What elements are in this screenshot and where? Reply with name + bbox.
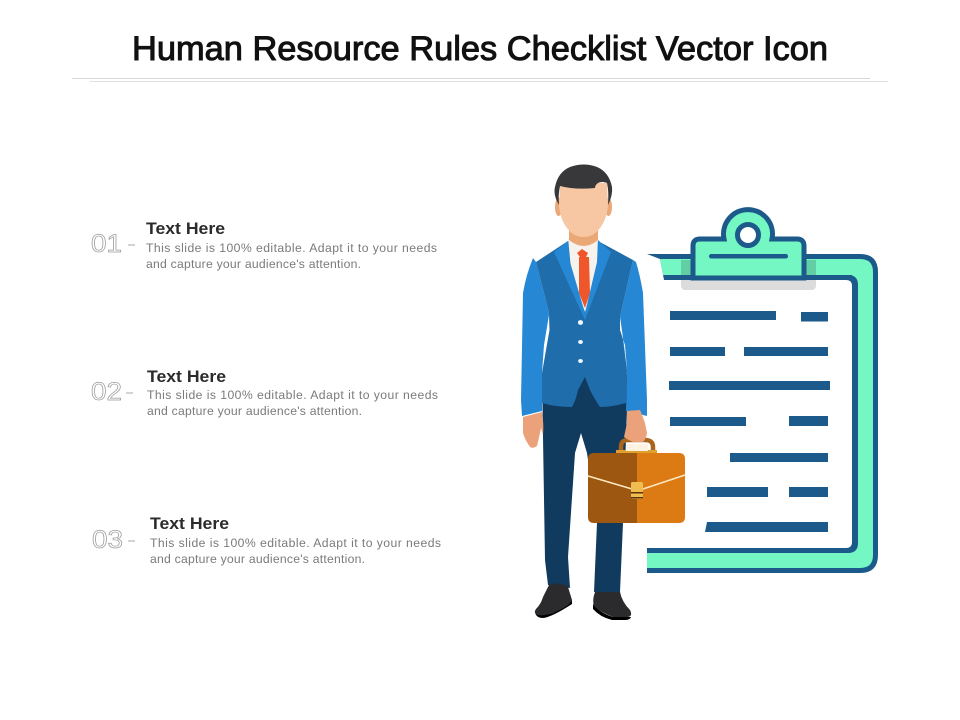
dash 03 — [128, 540, 135, 542]
sleeves — [521, 258, 647, 416]
checklist lines — [669, 311, 830, 532]
briefcase handle — [621, 440, 653, 451]
briefcase body — [588, 453, 637, 523]
shoes — [535, 583, 631, 620]
head — [554, 164, 612, 246]
description 03: and capture your audience's attention. — [150, 552, 365, 566]
dash 02 — [126, 392, 133, 394]
tie — [577, 249, 590, 308]
number 01: 01 — [91, 230, 122, 258]
right hand — [624, 410, 647, 442]
clipboard board — [647, 254, 878, 573]
lapels — [554, 240, 611, 320]
clip — [693, 210, 804, 278]
clipboard — [647, 210, 878, 573]
description 02: This slide is 100% editable. Adapt it to your needs — [147, 388, 438, 402]
item 01 — [91, 219, 437, 271]
buttons — [578, 320, 583, 363]
description 01 — [146, 241, 437, 271]
left hand — [523, 412, 543, 448]
item 02 — [91, 367, 438, 418]
description 02: and capture your audience's attention. — [147, 404, 362, 418]
number 02: 02 — [91, 378, 122, 406]
heading 02: Text Here — [147, 367, 226, 386]
number 03: 03 — [92, 526, 123, 554]
waistcoat — [536, 241, 633, 407]
title underline — [72, 78, 888, 82]
shirt — [568, 238, 598, 312]
clip shadow — [681, 260, 816, 290]
item 03 — [92, 514, 441, 566]
description 01: This slide is 100% editable. Adapt it to your needs — [146, 241, 437, 255]
briefcase — [588, 410, 685, 523]
description 03 — [150, 536, 441, 566]
heading 01: Text Here — [146, 219, 225, 238]
white sleeve gaps — [542, 315, 627, 373]
businessman — [521, 164, 685, 620]
title: Human Resource Rules Checklist Vector Icon — [132, 30, 828, 68]
description 01: and capture your audience's attention. — [146, 257, 361, 271]
heading 03: Text Here — [150, 514, 229, 533]
description 03: This slide is 100% editable. Adapt it to your needs — [150, 536, 441, 550]
dash 01 — [128, 244, 135, 246]
briefcase clasp — [631, 482, 643, 499]
description 02 — [147, 388, 438, 418]
trousers — [542, 375, 627, 592]
